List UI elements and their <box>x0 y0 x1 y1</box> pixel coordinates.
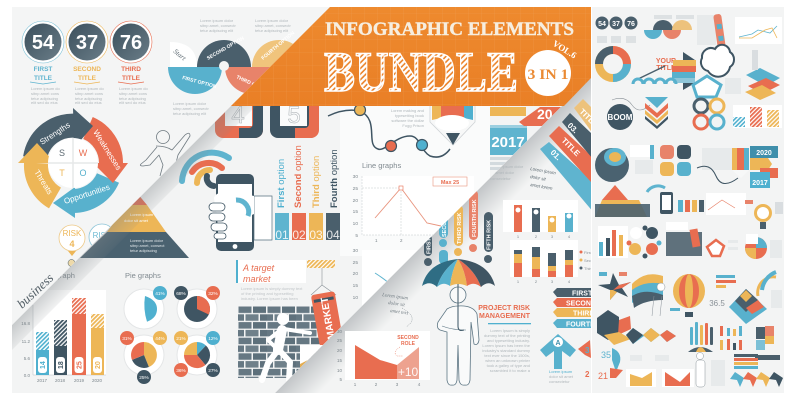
SWOT cycle: Opportunities <box>63 183 111 206</box>
layer: lower-right sheet with umbrella <box>275 78 591 393</box>
project risk management text <box>478 305 531 373</box>
project risk management text: scrambled it to make a <box>490 368 531 373</box>
bar chart <box>21 290 106 383</box>
pyramid chart: Lorem ipsum <box>130 212 154 217</box>
thumbnail row 6: bars, pies, brick wall, pentagon <box>598 222 782 259</box>
number badge: 37 second title: sitnp amet cons <box>75 91 103 96</box>
value callout: Max 25 <box>441 180 459 186</box>
risk pills: FIRST <box>426 237 432 254</box>
legend: Sec <box>584 258 591 263</box>
thumbnail row 3: bomb, chevrons, rings, bars <box>607 97 782 130</box>
callout: a target market: industry. Lorem Ipsum has been <box>241 296 298 301</box>
risk pills <box>424 190 493 266</box>
SWOT cycle: Threats <box>32 168 54 196</box>
text block: curve description: Fogg Prison <box>402 123 424 128</box>
risk badges: RISK <box>93 231 112 240</box>
y axis labels: 16.8 <box>21 321 30 326</box>
text block near tabs <box>490 166 523 180</box>
layer: lower-left sheet with graphs <box>22 106 561 384</box>
SWOT cycle: Weaknesses <box>91 128 123 172</box>
number badge: 54 first title: 54 <box>32 32 55 54</box>
callout: a target market: Lorem ipsum is simply dummy text <box>241 286 303 291</box>
number badge: 54 first title: Lorem ipsum do <box>31 86 60 91</box>
thumbnail row 2: swot, ribbon, cloud, isometric: TITLE <box>656 65 676 72</box>
number badge: 54 first title: tetur adipiscing <box>31 96 58 101</box>
badge: 3 in 1: 3 IN 1 <box>528 67 568 83</box>
heading: pie graphs: Pie graphs <box>125 271 161 280</box>
risk badges: 4 <box>69 239 75 249</box>
separator line beside thumbnails <box>591 7 592 393</box>
text block near tabs: Lorem ipsum dolor <box>490 164 524 169</box>
options: vertical labels and number bars: 02 <box>292 228 306 242</box>
text block: curve description: typesetting book <box>395 113 424 118</box>
handwritten note beside tabs: Lorem ipsum <box>530 166 557 176</box>
semicircle options chain: FIRST OPTION <box>181 75 217 90</box>
thumbnail row 1: badges and charts: 54 <box>598 21 606 28</box>
ribbon arrows list: SECOND <box>566 300 596 308</box>
thumbnail row 4: sphere, rounded tiles, pencil, timeline: 2020 <box>756 150 772 157</box>
icon: person under umbrella <box>422 259 495 385</box>
number badge: 37 second title: Lorem ipsum do <box>75 86 104 91</box>
pyramid chart: Lorem ipsum dolor <box>130 238 164 243</box>
callout: a target market: market <box>243 274 271 284</box>
area chart: second role: 1 <box>354 382 357 387</box>
timeline tags 2017 and 2018: 2017 <box>491 134 525 151</box>
text block: curve description <box>391 108 425 128</box>
blue up arrow with badge <box>540 334 591 384</box>
column chart: single series: 3 <box>551 234 554 239</box>
handwritten note and arrow: Lorem ipsum <box>381 293 409 302</box>
legend: First <box>584 250 593 255</box>
number badge: 37 second title: TITLE <box>78 75 97 82</box>
percentage badges: 32% <box>208 291 219 297</box>
percentage badges <box>120 286 220 384</box>
heading: bar graph: Bar graph <box>42 271 75 280</box>
brick wall <box>238 306 322 378</box>
SWOT letters <box>59 150 88 176</box>
y axis labels: 0.0 <box>24 373 30 378</box>
second line chart: 15 <box>353 283 358 289</box>
area chart: second role: 30 <box>337 329 342 334</box>
pyramid chart <box>80 193 189 258</box>
numbered tiles 4 and 5 <box>215 106 319 138</box>
options: vertical labels and number bars: Fourth option <box>329 149 340 208</box>
callout: a target market: of the printing and typesetting <box>241 291 293 296</box>
x axis labels <box>37 379 102 382</box>
number badge: 76 third title: 76 <box>120 32 142 54</box>
chart fragment under wall: 4 <box>317 381 320 386</box>
options: vertical labels and number bars: 03 <box>309 228 323 242</box>
text block near tabs: consectetur <box>490 176 511 181</box>
badge: 3 in 1 <box>525 50 571 96</box>
area chart: second role: 25 <box>337 338 342 343</box>
number badge: 54 first title <box>22 21 64 105</box>
risk badges <box>59 224 115 266</box>
handwritten note beside tabs <box>530 167 556 190</box>
title: infographic elements: INFOGRAPHIC ELEMENTS <box>325 19 574 40</box>
column chart: stacked: 2 <box>535 279 538 284</box>
text block: curve description: Lorem making and <box>391 108 424 113</box>
icon: running outline figure <box>140 130 190 176</box>
area chart: second role: 2 <box>375 382 378 387</box>
semicircle options chain: THIRD OPTION <box>235 74 271 95</box>
bar chart: 14 <box>40 361 47 369</box>
punching bag: market: MARKET <box>319 296 338 340</box>
area chart: second role: 15 <box>337 358 342 363</box>
second line chart: 30 <box>353 248 358 254</box>
line chart: 15 <box>353 209 358 215</box>
icon: running figure <box>262 313 310 380</box>
column chart: single series: 4 <box>568 234 571 239</box>
semicircle options chain: sitnp amet, consectr <box>173 106 209 111</box>
semicircle options chain: tetur adipiscing elit <box>173 111 207 116</box>
blue up arrow with badge: Lorem ipsum <box>549 369 573 374</box>
thumbnail row 8: cubes, chevron chain, pills, umbrella <box>597 310 780 361</box>
percentage badges: 41% <box>155 291 166 297</box>
numbered tiles 4 and 5: 4 <box>231 102 245 129</box>
risk pills: FIFTH RISK <box>486 220 492 250</box>
blue up arrow with badge: consectetur <box>549 379 570 384</box>
options: vertical labels and number bars: 04 <box>326 228 340 242</box>
percentage badges: 21% <box>176 336 187 342</box>
number badge: 37 second title: elit sed do eius <box>75 100 102 105</box>
area chart: second role: SECOND <box>397 335 419 341</box>
risk badges: RISK <box>63 229 82 238</box>
options: vertical labels and number bars: 01 <box>275 228 289 242</box>
percentage badges: 68% <box>176 291 187 297</box>
semicircle options chain: FOURTH OPTION <box>260 30 296 62</box>
semicircle options chain: tetur adipiscing elit <box>255 28 289 33</box>
area chart: second role: 5 <box>339 377 342 382</box>
second line chart: 20 <box>353 271 358 277</box>
thumbnail row 1: badges and charts: 37 <box>612 21 620 28</box>
pyramid chart: tetur adipiscing <box>130 248 157 253</box>
ribbon arrows list: FOURTH <box>566 322 595 328</box>
line chart: 2 <box>400 238 403 243</box>
title: bundle: BUNDLE <box>324 41 518 104</box>
bar chart: 18 <box>58 361 65 369</box>
project risk management text: Lorem Ipsum has been the <box>482 343 531 348</box>
line chart: 10 <box>353 221 358 227</box>
number badge: 54 first title: sitnp amet cons <box>31 91 59 96</box>
semicircle options chain <box>168 20 294 116</box>
semicircle options chain: tetur adipiscing elit <box>200 28 234 33</box>
SWOT cycle <box>18 108 128 218</box>
x axis labels: 2017 <box>37 378 48 383</box>
y axis labels: 11.2 <box>22 339 30 344</box>
SWOT letters: W <box>79 148 88 158</box>
line chart: 1 <box>375 238 378 243</box>
column chart: single series: 1 <box>517 234 520 239</box>
handwritten note beside tabs: dolor sit <box>530 174 547 182</box>
percentage badges: 25% <box>139 375 150 381</box>
percentage badges: 36% <box>176 368 187 374</box>
line chart: 20 <box>353 198 358 204</box>
number badge: 76 third title: tetur adipiscing <box>119 96 146 101</box>
small number tags by edge: 3 <box>585 346 590 355</box>
second line chart <box>352 249 412 306</box>
options: vertical labels and number bars <box>275 145 340 242</box>
line chart: 5 <box>355 233 358 239</box>
thumbnail row 1: badges and charts: 76 <box>627 21 635 28</box>
number badge: 54 first title: elit sed do eius <box>31 100 58 105</box>
text block near tabs: sit amet dolor <box>490 170 515 175</box>
risk pills: THIRD RISK <box>457 212 463 244</box>
script word on paper curl: business: business <box>14 270 56 311</box>
x axis labels: 2018 <box>55 378 66 383</box>
numbered tiles 4 and 5: 5 <box>287 102 301 129</box>
area chart: second role <box>337 329 430 387</box>
blue up arrow with badge: A <box>555 340 561 347</box>
area chart: second role: +10 <box>398 365 419 379</box>
pyramid chart: sitnp amet, consect <box>130 243 165 248</box>
semicircle options chain: sitnp amet, consectr <box>255 23 291 28</box>
number badge: 76 third title: elit sed do eius <box>119 100 146 105</box>
second line chart: 25 <box>353 260 358 266</box>
curve path with nodes <box>328 104 450 157</box>
thumbnail row 4: sphere, rounded tiles, pencil, timeline <box>595 145 778 188</box>
callout: a target market <box>236 260 306 301</box>
thumbnail row 9: figures, area charts, ribbons, arrows <box>598 348 783 387</box>
options: vertical labels and number bars: First option <box>276 159 287 208</box>
handwritten note beside tabs: amet lorem <box>530 182 553 191</box>
x axis labels: 2020 <box>92 378 103 383</box>
heading: line graphs: Line graphs <box>362 161 401 170</box>
project risk management text: and typesetting industry. <box>487 338 530 343</box>
column chart: stacked: 1 <box>517 279 520 284</box>
thumbnail row 3: bomb, chevrons, rings, bars: BOOM <box>608 113 633 122</box>
thumbnail row 2: swot, ribbon, cloud, isometric <box>599 45 780 100</box>
angled title tabs: 03. <box>566 121 580 135</box>
bar chart: 20 <box>95 361 102 369</box>
semicircle options chain: Lorem ipsum dolor <box>173 101 207 106</box>
angled title tabs <box>540 99 591 210</box>
project risk management text: text ever since the 1500s, <box>484 353 530 358</box>
number badge: 37 second title <box>66 21 108 105</box>
number badge: 37 second title: 37 <box>76 32 98 54</box>
label: volume 6: VOL.6 <box>551 38 579 61</box>
project risk management text: when an unknown printer <box>485 358 531 363</box>
thumbnail row 7: star, ribbons, balloon, arcs, diamonds <box>598 272 782 324</box>
angled title tabs: TITLE <box>578 107 600 130</box>
SWOT letters: T <box>59 168 65 178</box>
text block: curve description: software the dollar <box>391 118 425 123</box>
risk pills: SECOND <box>442 213 448 237</box>
area chart: second role: 10 <box>337 368 342 373</box>
number badge: 76 third title: sitnp amet cons <box>119 91 147 96</box>
y axis labels <box>22 322 30 377</box>
timeline tags 2017 and 2018 <box>490 106 562 170</box>
callout: a target market: A target <box>242 263 275 273</box>
icon: rainbow arcs <box>182 153 229 186</box>
percentage badges: 31% <box>122 336 133 342</box>
number badge: 76 third title <box>110 21 152 105</box>
pie graphs <box>120 286 220 384</box>
layer: top-left sheet <box>12 20 294 325</box>
fold shadow on lower sheet <box>12 7 355 350</box>
project risk management text: industry's standard dummy <box>482 348 530 353</box>
fold shadow on the right sheet <box>275 77 591 393</box>
column chart: stacked: 4 <box>568 279 571 284</box>
timeline tags 2017 and 2018: 20 <box>537 106 553 122</box>
bar chart: 25 <box>76 361 84 369</box>
semicircle options chain: Lorem ipsum dolor <box>255 18 289 23</box>
legend <box>580 250 593 271</box>
column chart: single series: 2 <box>535 234 538 239</box>
column chart: stacked: 3 <box>551 279 554 284</box>
semicircle options chain: Lorem ipsum dolor <box>200 18 234 23</box>
icon: pencil <box>430 105 475 145</box>
handwritten note and arrow <box>381 293 412 327</box>
angled title tabs: 01. <box>549 148 563 162</box>
SWOT cycle: Strengths <box>38 120 72 147</box>
thumbnail row 7: star, ribbons, balloon, arcs, diamonds: 36.5 <box>709 299 725 308</box>
thumbnail row 9: figures, area charts, ribbons, arrows: 21 <box>598 371 608 381</box>
number badge: 76 third title: THIRD <box>121 66 141 73</box>
percentage badges: 12% <box>208 336 219 342</box>
risk pills: FOURTH RISK <box>472 199 478 237</box>
semicircle options chain: Start <box>172 47 188 63</box>
area chart: second role: 20 <box>337 348 342 353</box>
area chart: second role: 4 <box>418 382 421 387</box>
blue up arrow with badge: dolor sit amet <box>549 374 574 379</box>
project risk management text: Lorem Ipsum is simply <box>490 328 530 333</box>
project risk management text: PROJECT RISK <box>478 305 530 312</box>
percentage badges: 44% <box>155 336 166 342</box>
project risk management text: took a galley of type and <box>487 363 530 368</box>
handwritten note and arrow: amet text <box>390 309 409 317</box>
number badge: 37 second title: tetur adipiscing <box>75 96 102 101</box>
thumbnail row 1: badges and charts <box>596 14 782 57</box>
small number tags by edge <box>585 346 590 379</box>
icon: smartphone held in hand <box>209 174 272 251</box>
right strip: thumbnail overview of all elements <box>595 14 783 387</box>
handwritten note and arrow: dolor sit <box>388 301 406 308</box>
ribbon arrows list <box>553 288 600 328</box>
project risk management text: dummy text of the printing <box>484 333 530 338</box>
pyramid chart: dolor sit amet <box>124 218 149 223</box>
legend: Thir <box>584 266 592 271</box>
ribbon arrows list: FIRST <box>572 290 593 298</box>
semicircle options chain: SECOND OPTION <box>206 35 246 62</box>
thumbnail row 4: sphere, rounded tiles, pencil, timeline: 2017 <box>752 180 768 187</box>
project risk management text: MANAGEMENT <box>479 313 531 320</box>
chart fragment under wall <box>300 345 323 368</box>
semicircle options chain: sitnp amet, consectr <box>200 23 236 28</box>
small number tags by edge: 2 <box>585 370 590 379</box>
options: vertical labels and number bars: Second option <box>293 145 304 208</box>
SWOT letters: O <box>79 168 87 178</box>
percentage badges: 27% <box>208 368 219 374</box>
line chart: 30 <box>353 174 358 180</box>
angled title tabs: TITLE <box>560 136 582 159</box>
y axis labels: 5.6 <box>24 356 30 361</box>
line chart <box>353 174 474 243</box>
x axis labels: 2019 <box>74 378 85 383</box>
ribbon arrows list: THIRD <box>573 310 594 318</box>
column chart: stacked <box>510 240 593 284</box>
SWOT letters: S <box>59 148 65 158</box>
number badge: 54 first title: TITLE <box>34 75 53 82</box>
banner: orange title ribbon <box>231 7 591 106</box>
column chart: single series <box>503 200 578 239</box>
number badge: 76 third title: TITLE <box>122 75 141 82</box>
line chart: 25 <box>353 186 358 192</box>
options: vertical labels and number bars: Third option <box>311 156 322 208</box>
thumbnail row 5: pyramid, phone, line charts, bulb <box>595 185 783 229</box>
thumbnail row 9: figures, area charts, ribbons, arrows: 35 <box>601 350 611 360</box>
area chart: second role: 3 <box>396 382 399 387</box>
area chart: second role: ROLE <box>401 341 416 347</box>
second line chart: 10 <box>353 295 358 301</box>
punching bag: market <box>307 260 343 346</box>
number badge: 76 third title: Lorem ipsum do <box>119 86 148 91</box>
number badge: 54 first title: FIRST <box>34 66 52 73</box>
number badge: 37 second title: SECOND <box>73 66 101 73</box>
thumbnail row 2: swot, ribbon, cloud, isometric: YOUR <box>656 58 676 65</box>
